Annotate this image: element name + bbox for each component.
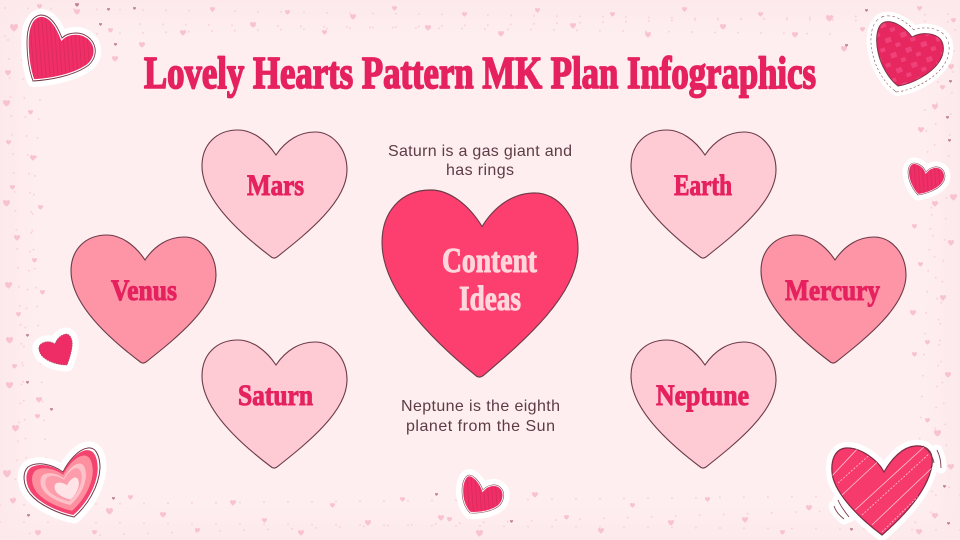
text: Saturn description: has rings xyxy=(446,162,514,179)
heart: Neptune: Neptune xyxy=(656,379,749,412)
heart: Mars xyxy=(202,130,347,258)
text: Saturn description xyxy=(388,143,572,179)
sticker heart: bottom center xyxy=(462,475,504,513)
heart: Saturn xyxy=(202,340,347,468)
sticker heart: left small xyxy=(39,334,72,365)
sticker heart: top left xyxy=(27,15,95,81)
heart: Mercury xyxy=(761,235,906,363)
central heart: Content Ideas: Content xyxy=(442,241,537,280)
heart: Neptune xyxy=(631,340,776,468)
text: Saturn description: Saturn is a gas giant and xyxy=(388,143,572,160)
sticker heart: top right xyxy=(877,22,943,86)
heart: Earth: Earth xyxy=(674,169,732,202)
text: Neptune description: planet from the Sun xyxy=(406,418,555,435)
central heart: Content Ideas: Ideas xyxy=(459,279,521,318)
heart: Venus: Venus xyxy=(111,274,177,307)
sticker heart: bottom left xyxy=(24,448,100,517)
heart: Saturn: Saturn xyxy=(238,379,313,412)
text: Neptune description: Neptune is the eighth xyxy=(401,398,560,415)
sticker heart: bottom right xyxy=(830,446,941,535)
heart: Earth xyxy=(631,130,776,258)
heart: Mercury: Mercury xyxy=(785,274,880,307)
heart: Mars: Mars xyxy=(247,169,304,202)
sticker heart: right small xyxy=(908,163,945,195)
text: Neptune description xyxy=(401,398,560,435)
central heart: Content Ideas xyxy=(382,190,578,377)
heart: Venus xyxy=(71,235,216,363)
